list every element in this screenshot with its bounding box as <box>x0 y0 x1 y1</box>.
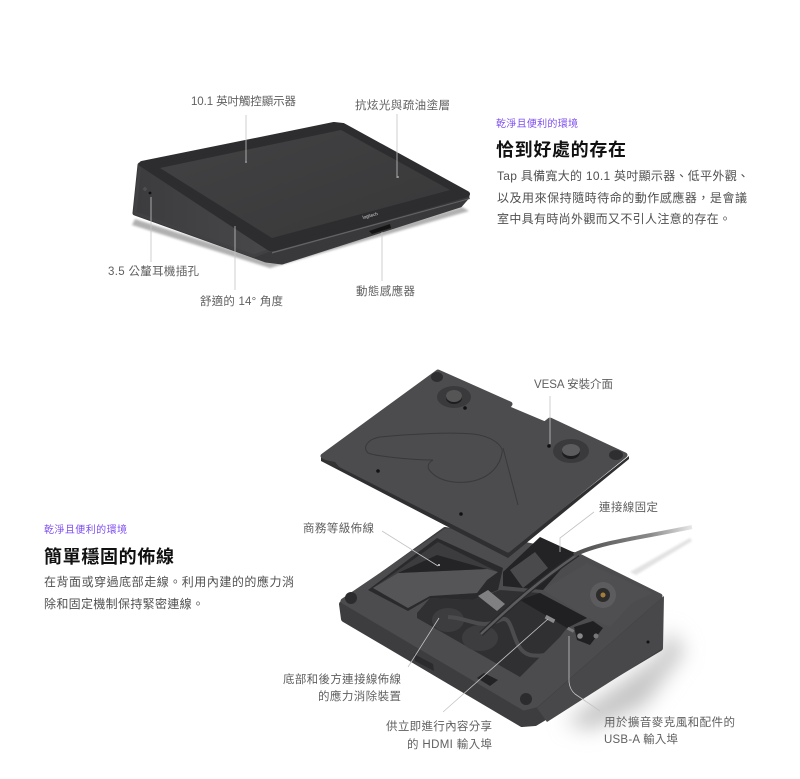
label: strain relief <box>283 672 402 703</box>
plate feet <box>431 372 443 382</box>
slot <box>414 654 434 671</box>
RJ45 plug <box>478 590 505 611</box>
label: USB-A: 用於擴音麥克風和配件的 <box>604 715 735 729</box>
plate holes <box>463 406 467 410</box>
plate embossing <box>366 433 518 505</box>
label: motion sensor: 動態感應器 <box>356 284 416 298</box>
mounting plate <box>321 456 629 558</box>
text block: top copy <box>496 117 749 226</box>
body: top: Tap 具備寬大的 10.1 英吋顯示器、低平外觀、 <box>497 168 749 183</box>
plate mounts <box>437 386 471 408</box>
side port <box>646 640 650 644</box>
text block: bottom copy <box>44 523 294 611</box>
label: coating: 抗炫光與疏油塗層 <box>355 98 450 112</box>
device: Tap base exploded view <box>321 372 692 730</box>
grille <box>477 673 498 686</box>
body: top: 室中具有時尚外觀而又不引人注意的存在。 <box>497 211 731 226</box>
strain relief discs <box>432 608 464 632</box>
cable tray <box>417 590 587 677</box>
label: HDMI: 供立即進行內容分享 <box>386 719 492 733</box>
body: bottom: 除和固定機制保持緊密連線。 <box>44 596 204 611</box>
label: cable retention: 連接線固定 <box>599 500 658 514</box>
right plateau <box>543 563 653 627</box>
device: Tap front view <box>132 125 470 268</box>
label: angle: 舒適的 14° 角度 <box>200 294 284 308</box>
body: bottom <box>44 574 294 611</box>
label: HDMI: 的 HDMI 輸入埠 <box>407 737 492 751</box>
label: headphone jack: 3.5 公釐耳機插孔 <box>108 264 200 278</box>
body: top: 以及用來保持隨時待命的動作感應器，是會議 <box>497 190 747 205</box>
base shadow <box>565 630 685 730</box>
internal dark block <box>503 537 575 590</box>
label: USB-A <box>604 715 735 746</box>
label: strain relief: 底部和後方連接線佈線 <box>283 672 402 686</box>
loose cables <box>448 617 566 656</box>
callout lines: front view <box>151 114 399 290</box>
eyebrow: top: 乾淨且便利的環境 <box>496 117 578 130</box>
heading: top: 恰到好處的存在 <box>496 140 626 160</box>
port block <box>574 621 603 645</box>
base body <box>342 530 660 724</box>
callout lines: exploded view <box>382 396 600 712</box>
body: bottom: 在背面或穿過底部走線。利用內建的的應力消 <box>44 574 294 589</box>
label: strain relief: 的應力消除裝置 <box>318 689 401 703</box>
label: VESA: VESA 安裝介面 <box>534 377 613 391</box>
label: display: 10.1 英吋觸控顯示器 <box>191 94 296 108</box>
label: HDMI <box>386 719 492 751</box>
ports <box>545 615 555 623</box>
label: USB-A: USB-A 輸入埠 <box>604 732 678 746</box>
rubber feet <box>345 592 357 604</box>
body: top <box>497 168 749 226</box>
label: business cabling: 商務等級佈線 <box>303 521 374 535</box>
left compartment <box>368 538 503 611</box>
heading: bottom: 簡單穩固的佈線 <box>44 546 174 567</box>
device: Tap front view: logitech <box>362 211 379 220</box>
eyebrow: bottom: 乾淨且便利的環境 <box>44 523 127 536</box>
